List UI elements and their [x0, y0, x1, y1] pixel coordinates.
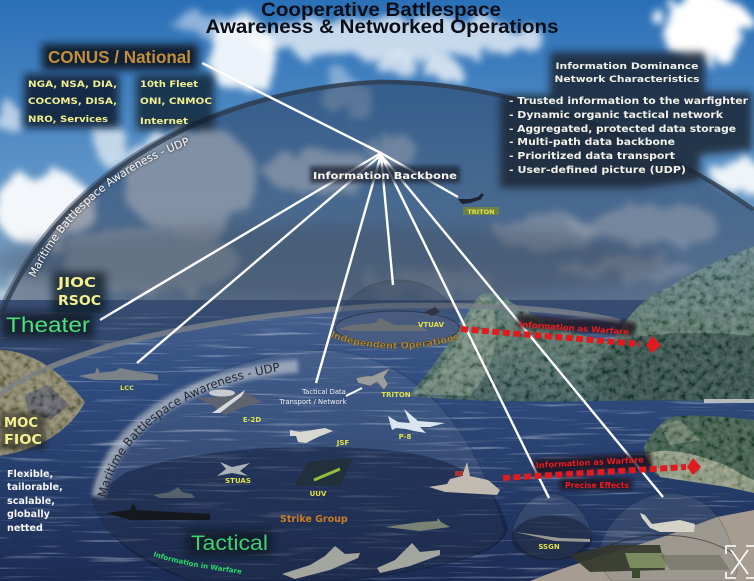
title [206, 0, 559, 38]
label: Information Backbone: Information Backbone [313, 171, 458, 182]
aircraft: E-2D [198, 390, 262, 424]
label: Tactical Data Transport [279, 388, 347, 406]
aircraft: P-8 [388, 409, 445, 441]
submarine [385, 518, 450, 531]
aircraft: TRITON [356, 368, 411, 399]
panel: Information Dominance Network Characteristics: - Prioritized data transport [509, 151, 676, 162]
ship: destroyer [429, 462, 500, 495]
panel: Information Dominance Network Characteristics: - Aggregated, protected data storage [509, 124, 736, 135]
ship: carrier [106, 503, 210, 520]
background: sky with clouds [0, 0, 754, 335]
label: Theater: Theater [6, 314, 90, 337]
ship: frigate [153, 487, 195, 498]
curved label: Maritime Battlespace Awareness tactical: Maritime Battlespace Awareness - UDP [98, 362, 279, 497]
cloud shadow band inside dome [0, 224, 670, 300]
aircraft: JSF [290, 428, 349, 447]
big dome tint [0, 81, 754, 366]
vehicles on beach [570, 545, 730, 578]
panel: Information Dominance Network Characteristics: - Multi-path data backbone [509, 137, 675, 148]
label: Information as Warfare lower: Information as Warfare [536, 455, 645, 470]
aircraft: E-2D: E-2D [243, 416, 261, 424]
vehicle: UUV: UUV [310, 490, 327, 498]
curved label: Information in Warfare: Information in Warfare [154, 551, 242, 574]
label: JIOC RSOC: JIOC [57, 275, 96, 291]
text block: Flexible: Flexible, [7, 469, 53, 480]
text block: national agencies: NGA, NSA, DIA, [28, 80, 117, 90]
icon: expand arrows [726, 546, 754, 578]
text block: fleet and internet: 10th Fleet [140, 80, 199, 90]
aircraft: STUAS: STUAS [225, 477, 251, 485]
ship: LCC: LCC [120, 384, 134, 392]
text block: national agencies [24, 74, 119, 128]
big dome outline: Maritime Battlespace Awareness [0, 82, 754, 318]
label: Precise Effects [560, 478, 632, 490]
panel: Information Dominance Network Characteristics: - User-defined picture (UDP) [509, 165, 686, 176]
label: Tactical: Tactical [191, 532, 268, 555]
label: Strike Group: Strike Group [280, 514, 348, 525]
panel: Information Dominance Network Characteristics [500, 52, 752, 188]
label: Precise Effects: Precise Effects [565, 481, 629, 490]
label: Information Backbone [310, 166, 460, 183]
label: MOC FIOC: MOC [4, 416, 38, 431]
label: Information as Warfare upper [517, 314, 635, 337]
left island [0, 345, 110, 456]
aircraft: JSF: JSF [336, 439, 349, 447]
horizon band [0, 306, 620, 397]
arrow: lower red dashed [503, 458, 701, 478]
label: JIOC RSOC: RSOC [58, 293, 101, 309]
vehicle: UUV [294, 458, 353, 498]
independent operations dome [335, 280, 460, 345]
label: SSGN: SSGN [538, 543, 560, 551]
helicopter dome [599, 493, 737, 581]
arrow: upper red dashed [461, 329, 661, 353]
text block: Flexible: scalable, [7, 496, 55, 507]
panel: Information Dominance Network Characteristics: - Trusted information to the warfighter [509, 96, 748, 107]
text block: Flexible [7, 469, 63, 534]
text block: Flexible: tailorable, [7, 482, 63, 493]
land: beach [530, 510, 754, 581]
ship: LCC [78, 367, 158, 392]
label: Tactical Data Transport: Tactical Data [301, 388, 346, 396]
panel: Information Dominance Network Characteristics: - Dynamic organic tactical network [509, 110, 724, 121]
TRITON high altitude: TRITON [467, 208, 495, 216]
background: wave highlights [0, 312, 754, 581]
aircraft: P-8: P-8 [399, 433, 412, 441]
aircraft: TRITON: TRITON [381, 391, 411, 399]
curved label: Maritime Battlespace Awareness upper: Maritime Battlespace Awareness - UDP [27, 136, 190, 278]
title: Awareness & Networked Operations [206, 16, 559, 38]
text block: national agencies: NRO, Services [28, 115, 108, 125]
tactical inner dome [92, 447, 508, 581]
tactical outer dome [92, 350, 505, 581]
label: MOC FIOC: FIOC [4, 433, 42, 448]
panel: Information Dominance Network Characteristics: Network Characteristics [554, 74, 700, 85]
label: MOC FIOC [0, 412, 46, 450]
text block: national agencies: COCOMS, DISA, [28, 97, 117, 107]
TRITON high altitude [458, 193, 499, 216]
panel: Information Dominance Network Characteristics: Information Dominance [556, 61, 698, 72]
info lines [100, 63, 663, 498]
label: VTUAV: VTUAV [418, 321, 445, 329]
text block: fleet and internet: ONI, CNMOC [140, 97, 212, 107]
label: VTUAV [418, 307, 445, 329]
ship: amphibious second [377, 543, 440, 573]
label: Information as Warfare lower [534, 453, 652, 475]
ship: amphibious [282, 546, 360, 579]
background: sea [0, 300, 754, 581]
land: right headland [644, 416, 754, 493]
SSGN dome [512, 493, 593, 560]
pointer line to TRITON [346, 388, 362, 396]
text block: Flexible: globally [7, 509, 51, 520]
curved label: Independent Operations: Independent Operations [330, 330, 459, 350]
label: Tactical Data Transport: Transport / Network [279, 398, 347, 406]
label: Information as Warfare upper: Information as Warfare [519, 320, 630, 337]
label: JIOC RSOC [52, 272, 106, 314]
mountains [408, 246, 754, 403]
aircraft: STUAS [217, 462, 251, 485]
panel: CONUS / National: CONUS / National [48, 47, 191, 67]
text block: fleet and internet: Internet [140, 117, 189, 127]
text block: Flexible: netted [7, 523, 43, 534]
label: Theater [2, 312, 94, 338]
text block: fleet and internet [136, 74, 214, 130]
